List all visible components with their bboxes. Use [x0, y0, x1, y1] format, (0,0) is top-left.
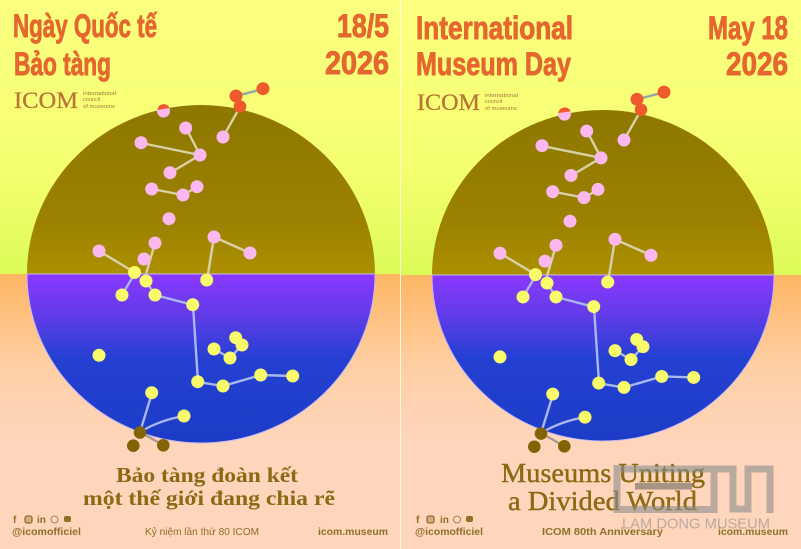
constellation: upper network [494, 86, 670, 282]
logo: ICOM: of museums [485, 106, 517, 112]
date: May 18 2026 [708, 10, 788, 82]
circle: lower half [27, 274, 375, 443]
social icons: in [440, 515, 449, 526]
title: International Museum Day: International [416, 10, 573, 46]
slogan: Bảo tàng đoàn kết một thế giới đang chia rẽ: Bảo tàng đoàn kết [116, 463, 298, 487]
logo: ICOM: of museums [83, 104, 115, 110]
circle: lower half [432, 275, 774, 441]
title: Ngày Quốc tế Bảo tàng: Bảo tàng [14, 46, 111, 82]
background: peach ground [401, 275, 801, 549]
logo: ICOM [417, 90, 518, 115]
title: International Museum Day [416, 10, 573, 82]
slogan: Museums Uniting a Divided World: a Divided World [508, 486, 698, 516]
footer: handle: @icomofficiel [415, 527, 483, 538]
circle: upper half [432, 110, 774, 275]
footer: website: icom.museum [718, 527, 788, 538]
social icons: f [13, 515, 17, 526]
date: 18/5 2026: 18/5 [337, 8, 389, 44]
date: May 18 2026: 2026 [726, 46, 788, 82]
social icons: f [416, 515, 420, 526]
footer: website: icom.museum [318, 527, 388, 538]
panel: Vietnamese poster [0, 0, 400, 549]
title: International Museum Day: Museum Day [416, 46, 571, 82]
slogan: Bảo tàng đoàn kết một thế giới đang chia rẽ: một thế giới đang chia rẽ [83, 486, 335, 510]
panel: English poster [401, 0, 801, 549]
title: Ngày Quốc tế Bảo tàng: Ngày Quốc tế [13, 8, 157, 44]
background: peach ground [0, 274, 400, 549]
watermark: Lam Dong Museum: LAM DONG MUSEUM [622, 516, 770, 532]
background: yellow sky [0, 0, 400, 274]
date: 18/5 2026 [325, 8, 389, 81]
social icons [416, 515, 473, 526]
slogan: Museums Uniting a Divided World: Museums Uniting [501, 458, 705, 488]
footer: handle: @icomofficiel [12, 527, 81, 538]
logo: ICOM: ICOM [14, 88, 78, 113]
slogan: Bảo tàng đoàn kết một thế giới đang chia rẽ [83, 463, 335, 510]
logo: ICOM [14, 88, 116, 113]
social icons [13, 515, 71, 526]
constellation: upper network [92, 82, 270, 280]
footer: anniversary: ICOM 80th Anniversary [542, 527, 663, 538]
logo: ICOM: international [83, 91, 116, 97]
social icons: in [37, 515, 46, 526]
constellation: lower network [494, 268, 700, 453]
title: Ngày Quốc tế Bảo tàng [13, 8, 157, 82]
constellation: lower network [92, 266, 299, 452]
circle: upper half [27, 105, 375, 274]
date: 18/5 2026: 2026 [325, 45, 389, 81]
background: yellow sky [401, 0, 801, 275]
logo: ICOM: ICOM [417, 90, 480, 115]
logo: ICOM: council [83, 97, 100, 103]
footer: anniversary: Kỷ niệm lần thứ 80 ICOM [145, 526, 259, 538]
logo: ICOM: council [485, 99, 502, 105]
logo: ICOM: international [485, 93, 518, 99]
watermark: Lam Dong Museum [617, 465, 770, 532]
slogan: Museums Uniting a Divided World [501, 458, 705, 516]
